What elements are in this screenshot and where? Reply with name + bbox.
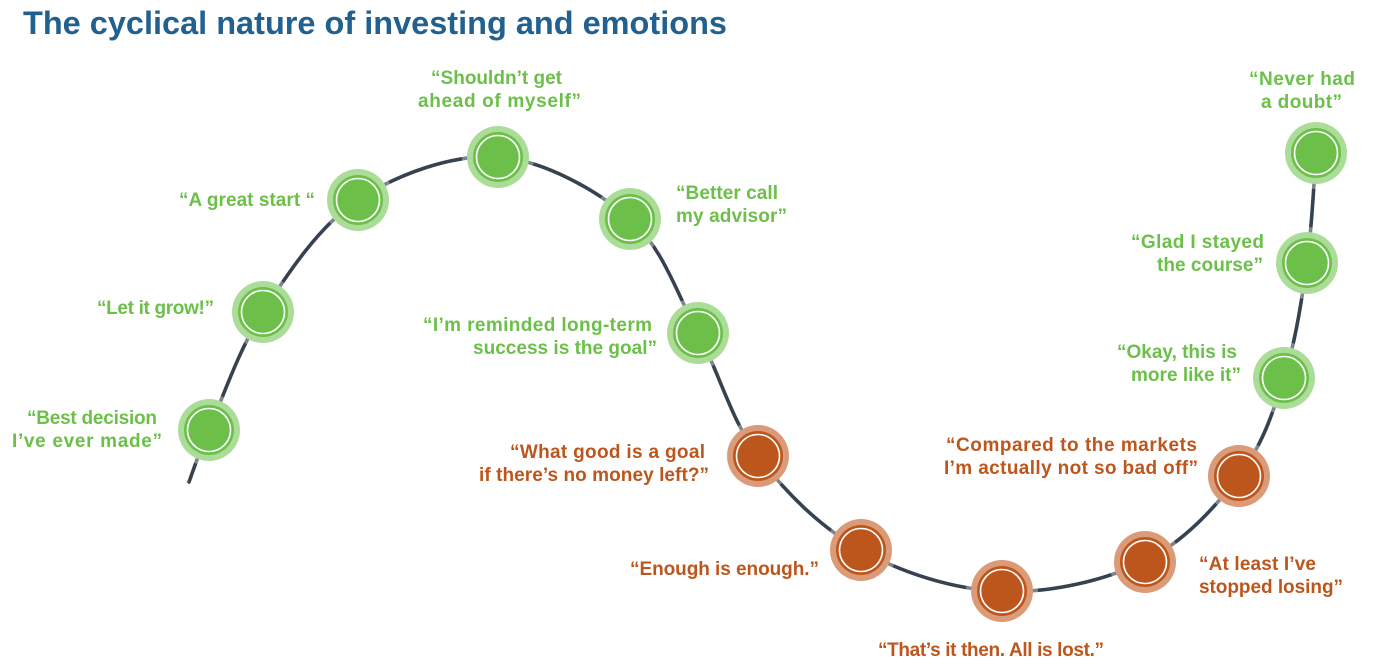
label: Never had a doubt: a doubt” xyxy=(1261,92,1342,113)
label: Better call: my advisor” xyxy=(676,206,787,227)
node: Okay xyxy=(1248,342,1320,414)
node: Reminded xyxy=(662,297,734,369)
label: Best decision xyxy=(12,408,162,452)
label: Glad I stayed xyxy=(1131,232,1264,276)
curve line xyxy=(189,153,1316,591)
label: What good: if there’s no money left?” xyxy=(479,465,709,486)
label: What good xyxy=(479,442,709,486)
node: Never had a doubt xyxy=(1280,117,1352,189)
label: Okay: more like it” xyxy=(1131,365,1241,386)
node: All is lost xyxy=(966,555,1038,627)
label: Shouldn't get ahead: “Shouldn’t get xyxy=(431,68,563,89)
label: Stopped losing: stopped losing” xyxy=(1199,577,1343,598)
label: Shouldn't get ahead: ahead of myself” xyxy=(418,91,581,112)
label: Better call xyxy=(676,183,787,227)
label: Best decision: “Best decision xyxy=(27,408,157,429)
label: Compared to markets xyxy=(944,435,1198,479)
node: Shouldn't get ahead xyxy=(462,121,534,193)
label: Okay xyxy=(1117,342,1241,386)
label: Okay: “Okay, this is xyxy=(1117,342,1237,363)
label: Enough: “Enough is enough.” xyxy=(630,559,819,580)
label: Shouldn't get ahead xyxy=(418,68,581,112)
node: Compared to markets xyxy=(1203,440,1275,512)
label: Compared to markets: I’m actually not so bad off” xyxy=(944,458,1198,479)
label: Let it grow: “Let it grow!” xyxy=(97,298,214,319)
label: Stopped losing xyxy=(1199,554,1343,598)
label: Best decision: I’ve ever made” xyxy=(12,431,162,452)
node: Enough xyxy=(825,514,897,586)
node: What good xyxy=(722,420,794,492)
label: Never had a doubt: “Never had xyxy=(1249,69,1355,90)
label: Stopped losing: “At least I’ve xyxy=(1199,554,1316,575)
label: Reminded: “I’m reminded long-term xyxy=(423,315,652,336)
label: All is lost: “That’s it then. All is lost.” xyxy=(878,640,1104,661)
label: What good: “What good is a goal xyxy=(510,442,705,463)
label: Never had a doubt xyxy=(1249,69,1355,113)
label: Compared to markets: “Compared to the markets xyxy=(946,435,1197,456)
label: A great start: “A great start “ xyxy=(179,190,315,211)
label: Reminded: success is the goal” xyxy=(473,338,657,359)
label: Reminded xyxy=(423,315,657,359)
node: Better call xyxy=(594,183,666,255)
node: Glad I stayed xyxy=(1271,227,1343,299)
label: Glad I stayed: “Glad I stayed xyxy=(1131,232,1264,253)
node: Best decision xyxy=(173,394,245,466)
node: Stopped losing xyxy=(1109,526,1181,598)
title: The cyclical nature of investing and emotions xyxy=(23,5,727,41)
label: Better call: “Better call xyxy=(676,183,778,204)
label: Glad I stayed: the course” xyxy=(1157,255,1263,276)
node: Let it grow xyxy=(227,276,299,348)
node: A great start xyxy=(322,164,394,236)
